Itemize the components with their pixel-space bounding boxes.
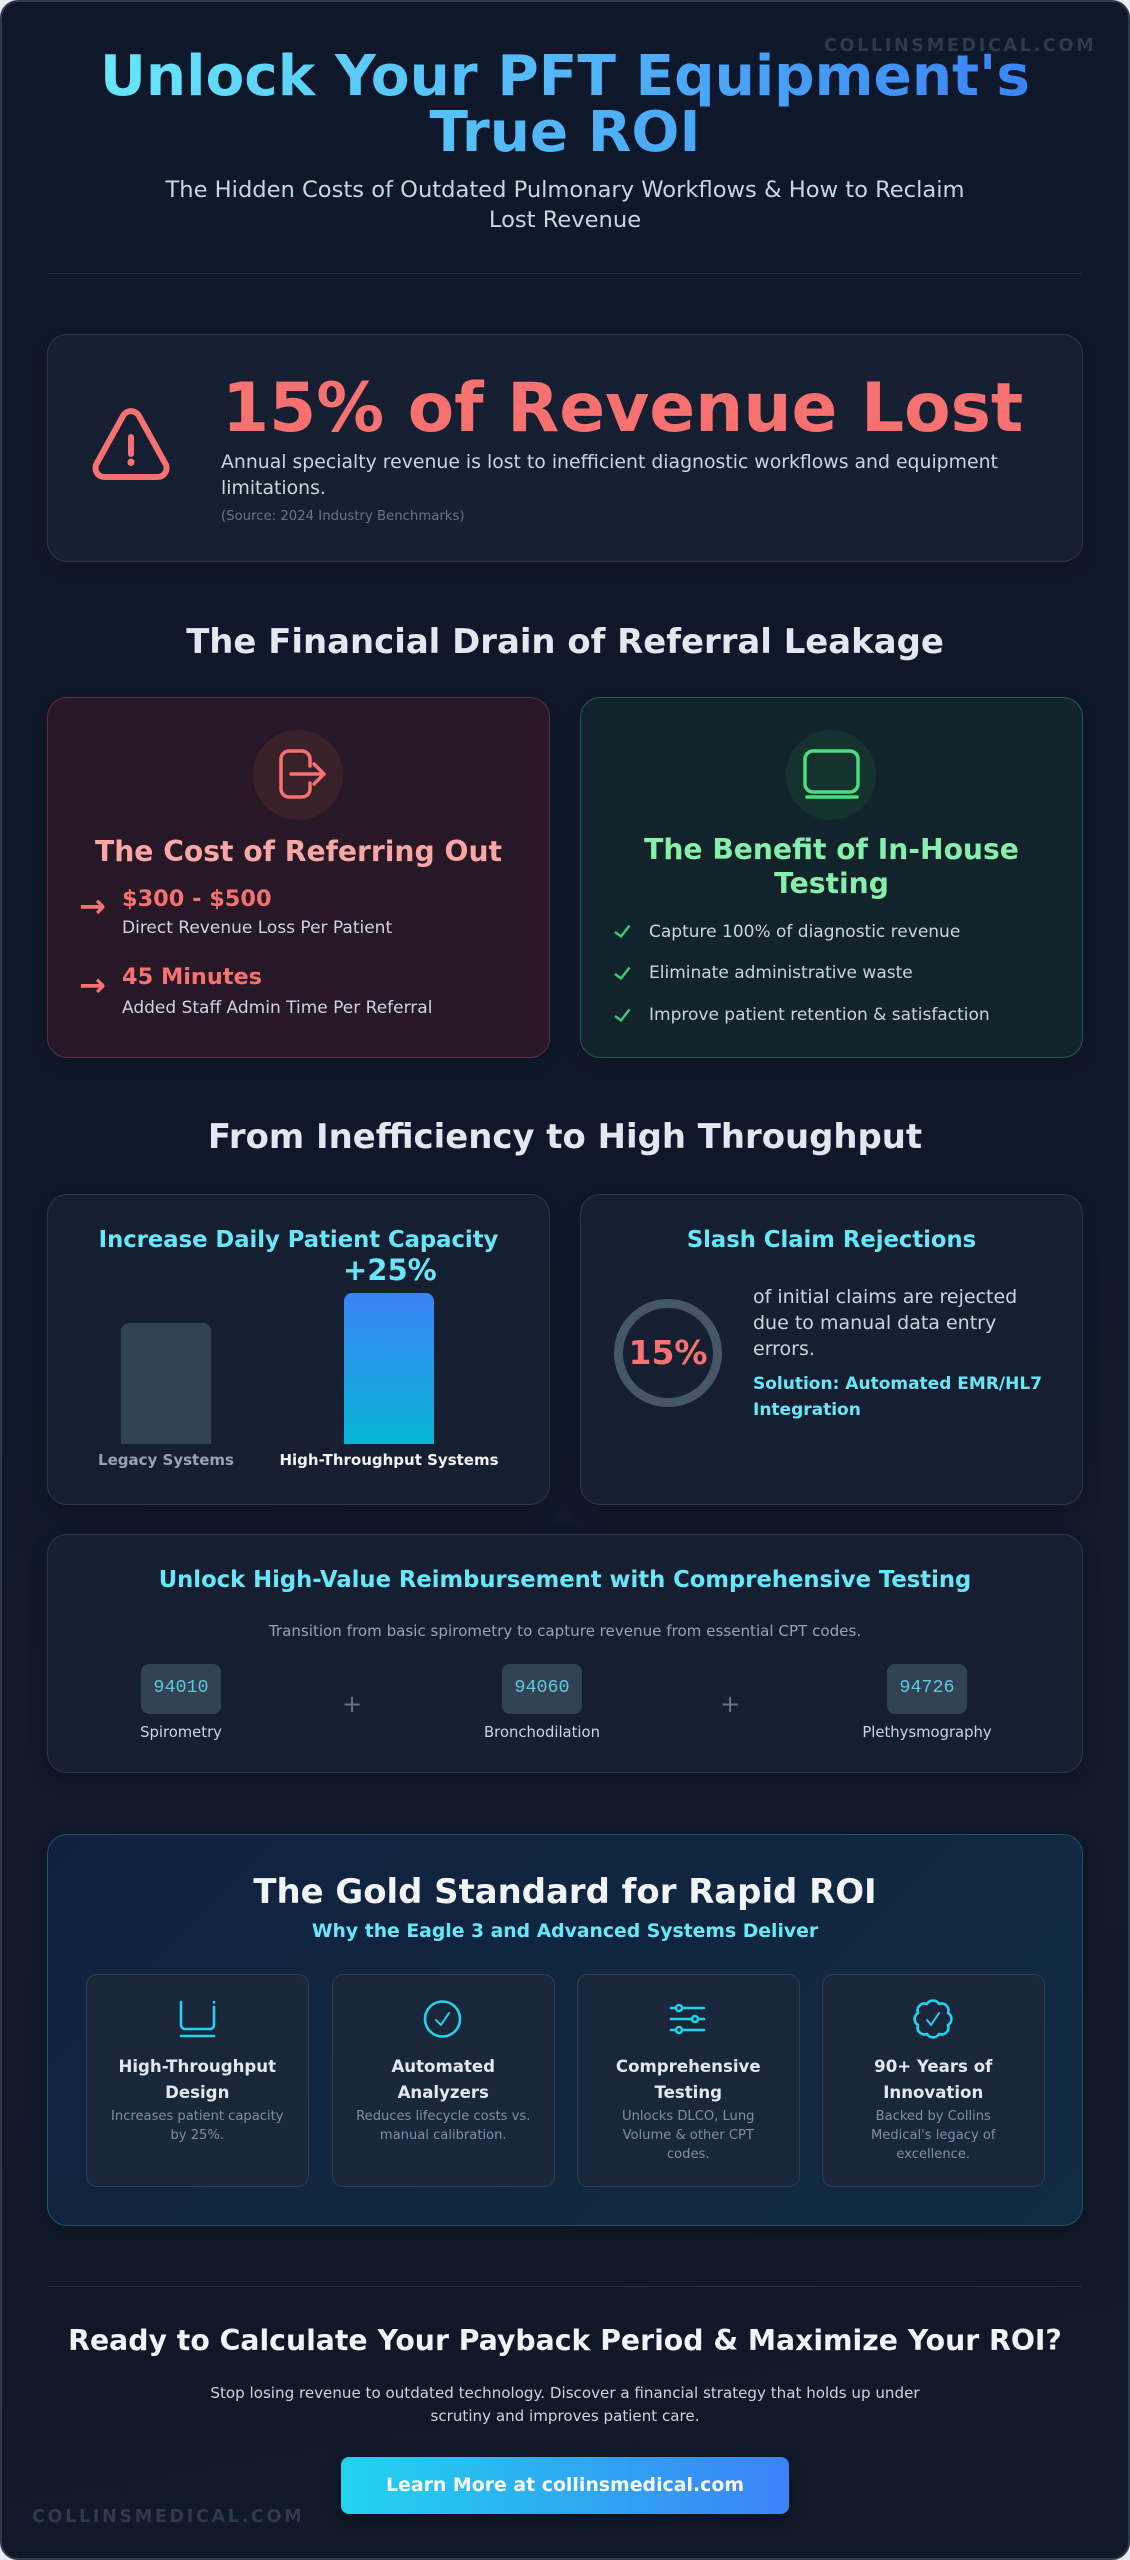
stat: revenue loss: $300 - $500 (122, 886, 272, 912)
stat: admin time: 45 Minutes (122, 964, 262, 990)
donut 15% (614, 1298, 722, 1406)
call to action button: Learn More at collinsmedical.com (386, 2474, 744, 2496)
panel description: Transition from basic spirometry to capture revenue from essential CPT codes. (269, 1622, 861, 1640)
rejection text: due to manual data entry (753, 1312, 996, 1334)
card heading (616, 2056, 761, 2102)
label spirometry: Spirometry (140, 1724, 222, 1740)
label plethysmography: Plethysmography (862, 1724, 992, 1740)
panel title: The Gold Standard for Rapid ROI (253, 1872, 877, 1910)
stat headline: 15% of Revenue Lost (222, 368, 1023, 447)
card title: The Cost of Referring Out (95, 834, 502, 868)
panel heading: Unlock High-Value Reimbursement with Comprehensive Testing (159, 1567, 971, 1593)
card heading: 90+ Years of (874, 2056, 992, 2076)
panel: cost of referring out (47, 697, 550, 1058)
code 94060 (502, 1664, 582, 1714)
label bronchodilation: Bronchodilation (484, 1724, 600, 1740)
card text: codes. (667, 2146, 710, 2162)
solution text (753, 1374, 1042, 1420)
donut 15%: 15% (628, 1332, 708, 1372)
call to action button (341, 2456, 789, 2514)
bar: legacy (121, 1322, 211, 1444)
bar label: high-throughput: High-Throughput Systems (279, 1450, 499, 1468)
source note: (Source: 2024 Industry Benchmarks) (221, 508, 465, 524)
card text (622, 2108, 754, 2162)
check 3 (614, 1008, 630, 1022)
card heading: Analyzers (398, 2083, 489, 2102)
icon: open tray (180, 2000, 216, 2038)
card heading: Design (165, 2083, 229, 2102)
card text: Medical's legacy of (871, 2128, 996, 2142)
call to action text: scrutiny and improves patient care. (430, 2407, 700, 2425)
card: high-throughput design (86, 1974, 308, 2187)
panel subtitle: Why the Eagle 3 and Advanced Systems Deliver (312, 1920, 818, 1942)
icon: sliders (670, 2004, 706, 2034)
check 1 (614, 924, 630, 938)
icon: scalloped badge (913, 1999, 953, 2039)
card heading: Automated (391, 2056, 495, 2076)
icon: warning triangle (92, 408, 170, 480)
code 94010: 94010 (153, 1676, 209, 1698)
icon: exit arrow in circle (253, 730, 343, 820)
stat description: limitations. (221, 478, 326, 499)
section heading: referral leakage: The Financial Drain of Referral Leakage (186, 622, 944, 660)
title: Unlock Your PFT Equipment's (100, 44, 1030, 109)
card text: Volume & other CPT (623, 2128, 754, 2142)
panel: claim rejections (580, 1194, 1083, 1505)
card text: Backed by Collins (876, 2108, 991, 2124)
card heading: Innovation (883, 2083, 983, 2102)
watermark top: COLLINSMEDICAL.COM (824, 36, 1096, 56)
code 94726 (887, 1664, 967, 1714)
card heading: Comprehensive (616, 2056, 761, 2076)
stat description (221, 452, 998, 499)
panel: CPT codes (47, 1534, 1083, 1773)
panel heading: Slash Claim Rejections (687, 1227, 976, 1253)
benefit 2: Eliminate administrative waste (649, 963, 913, 983)
stat caption: Direct Revenue Loss Per Patient (122, 918, 392, 938)
plus 2: + (720, 1690, 740, 1718)
card heading (391, 2056, 495, 2102)
panel: benefit of in-house testing (580, 697, 1083, 1058)
card: automated analyzers (332, 1974, 554, 2187)
rejection text: of initial claims are rejected (753, 1286, 1017, 1308)
stat caption: Added Staff Admin Time Per Referral (122, 998, 432, 1018)
panel: capacity bar chart (47, 1194, 550, 1505)
check 2 (614, 966, 630, 980)
card text: manual calibration. (380, 2128, 507, 2142)
card heading: Testing (654, 2083, 722, 2102)
rejection text: errors. (753, 1338, 815, 1360)
bar: high-throughput (344, 1292, 434, 1444)
card heading (874, 2056, 992, 2102)
arrow 1: → (79, 886, 106, 924)
rejection text (753, 1286, 1017, 1360)
icon: laptop in circle (786, 730, 876, 820)
card text: by 25%. (170, 2128, 224, 2142)
panel: 15% revenue lost (47, 334, 1083, 562)
benefit list (614, 922, 990, 1024)
card heading: High-Throughput (118, 2056, 276, 2076)
card heading (118, 2056, 276, 2102)
card: years of innovation (822, 1974, 1044, 2187)
card title: The Benefit of In-House (644, 833, 1019, 866)
plus 1: + (342, 1690, 362, 1718)
card text (356, 2108, 530, 2142)
subtitle: Lost Revenue (489, 207, 641, 233)
panel heading: Increase Daily Patient Capacity (99, 1227, 498, 1253)
card text: excellence. (896, 2146, 970, 2162)
card text (111, 2108, 283, 2142)
card text: Unlocks DLCO, Lung (622, 2108, 754, 2124)
card title (644, 833, 1019, 900)
watermark bottom: COLLINSMEDICAL.COM (32, 2506, 304, 2526)
call to action heading: Ready to Calculate Your Payback Period & Maximize Your ROI? (68, 2324, 1062, 2357)
card text (871, 2108, 996, 2162)
code 94060: 94060 (514, 1676, 570, 1698)
solution text: Solution: Automated EMR/HL7 (753, 1374, 1042, 1394)
value label +25%: +25% (343, 1252, 437, 1286)
stat description: Annual specialty revenue is lost to inefficient diagnostic workflows and equipment (221, 452, 998, 473)
subtitle (165, 177, 965, 233)
code 94726: 94726 (899, 1676, 955, 1698)
card text: Reduces lifecycle costs vs. (356, 2108, 530, 2124)
call to action text: Stop losing revenue to outdated technology. Discover a financial strategy that holds up under (210, 2384, 920, 2402)
bar label: legacy: Legacy Systems (98, 1450, 234, 1468)
call to action text (210, 2384, 920, 2425)
icon: check circle (424, 2000, 462, 2038)
arrow 2: → (79, 966, 106, 1004)
code 94010 (141, 1664, 221, 1714)
card text: Increases patient capacity (111, 2108, 283, 2124)
subtitle: The Hidden Costs of Outdated Pulmonary Workflows & How to Reclaim (165, 177, 965, 203)
solution text: Integration (753, 1400, 861, 1420)
benefit 3: Improve patient retention & satisfaction (649, 1004, 990, 1024)
title (100, 49, 1030, 161)
section heading: throughput: From Inefficiency to High Throughput (208, 1117, 922, 1156)
benefit 1: Capture 100% of diagnostic revenue (649, 922, 960, 942)
card: comprehensive testing (577, 1974, 800, 2187)
title: True ROI (430, 100, 700, 165)
card title: Testing (774, 866, 889, 900)
panel: gold standard (47, 1834, 1083, 2226)
